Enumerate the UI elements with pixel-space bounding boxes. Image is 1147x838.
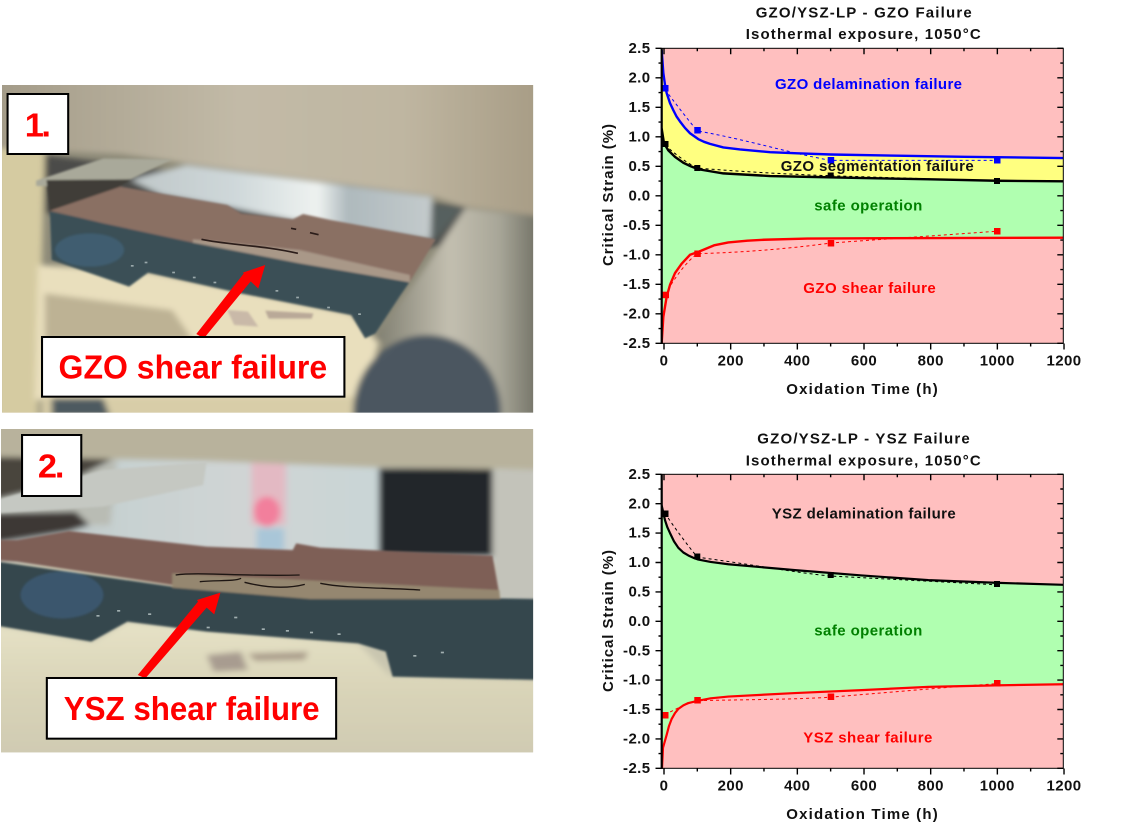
x axis tick labels: 200 [718,353,744,370]
x axis tick labels: 1000 [980,353,1015,370]
label box: YSZ shear failure [47,678,336,739]
axes and ticks [658,474,1065,772]
x axis tick labels: 800 [918,778,944,795]
x axis tick labels: 600 [851,778,877,795]
photograph of GZO coating failure [2,85,534,413]
x axis tick labels: 1200 [1047,353,1081,370]
region: safe operation [662,147,1063,314]
y axis title: Critical Strain (%) [600,550,617,692]
panel: photo 1, GZO shear failure [2,85,534,413]
axes and ticks [658,48,1065,346]
label box: 2. [22,435,81,496]
chart: YSZ failure map [600,430,1081,823]
y axis tick labels: -2.0 [623,730,650,748]
y axis tick labels: -1.0 [623,672,650,689]
region labels: safe operation [814,198,922,214]
x axis tick labels: 0 [660,353,668,370]
y axis tick labels: -2.0 [623,305,650,322]
label box: 1. [8,94,68,154]
label box: YSZ shear failure: YSZ shear failure [64,690,320,728]
region labels [775,76,974,297]
y axis tick labels: 1.5 [628,99,650,116]
chart title [746,4,981,43]
y axis tick labels: -0.5 [623,217,650,234]
chart title: Isothermal exposure, 1050°C [746,26,981,43]
y axis tick labels: 1.0 [628,128,650,145]
x axis title: Oxidation Time (h) [786,806,938,823]
chart title: Isothermal exposure, 1050°C [746,452,981,469]
label box: 1.: 1. [25,107,51,145]
plot regions and curves [661,48,1065,343]
x axis tick labels: 0 [660,778,668,795]
region: safe operation [662,517,1063,745]
x axis tick labels: 400 [784,353,810,370]
y axis tick labels: 0.0 [628,187,650,204]
y axis tick labels: 2.0 [628,69,650,86]
arrow pointing at crack [196,265,265,338]
chart: GZO failure map [600,4,1081,398]
curve: segmentation limit [662,129,1065,181]
y axis tick labels: 0.0 [628,613,650,630]
region labels: safe operation [814,622,922,640]
y axis tick labels: 2.0 [628,495,650,512]
label box: GZO shear failure: GZO shear failure [59,349,327,386]
y axis tick labels: 0.5 [628,584,650,600]
region labels: GZO segmentation failure [781,158,974,175]
label box: GZO shear failure [42,337,344,397]
dashed data lines [665,513,997,585]
x axis tick labels: 600 [851,353,877,370]
region labels: YSZ shear failure [803,730,932,746]
x axis tick labels: 800 [918,353,944,370]
chart title: GZO/YSZ-LP - GZO Failure [756,4,972,21]
markers [662,510,1000,718]
curve: shear limit [662,684,1065,768]
y axis tick labels: 2.5 [628,466,650,483]
plot regions and curves [661,474,1065,768]
x axis tick labels: 200 [718,778,744,795]
y axis tick labels [623,466,650,777]
region labels [772,506,956,746]
curve: shear limit [662,238,1065,343]
y axis tick labels: -1.5 [623,701,650,718]
y axis tick labels: 1.0 [628,554,650,571]
region: segmentation failure [662,77,1063,180]
chart title [746,430,981,469]
x axis tick labels: 400 [784,778,810,795]
y axis tick labels: -2.5 [623,760,650,777]
region labels: GZO delamination failure [775,76,962,93]
x axis tick labels: 1200 [1047,778,1081,795]
arrow pointing at crack [138,593,220,678]
region labels: GZO shear failure [803,280,936,297]
label box: 2.: 2. [38,448,64,485]
chart title: GZO/YSZ-LP - YSZ Failure [757,430,970,447]
photograph of YSZ coating failure [0,418,544,758]
y axis tick labels: -1.5 [623,276,650,293]
markers [662,85,1000,298]
panel: photo 2, YSZ shear failure [0,418,544,758]
x axis title: Oxidation Time (h) [786,381,938,398]
y axis tick labels: 1.5 [628,525,650,542]
y axis tick labels: 2.5 [628,40,650,57]
curve: delamination limit [662,505,1065,585]
y axis tick labels: -0.5 [623,642,650,659]
dashed data lines [665,90,997,160]
y axis tick labels: -2.5 [623,335,650,352]
y axis tick labels: 0.5 [628,158,650,175]
y axis tick labels [623,40,650,352]
x axis tick labels [660,778,1081,795]
x axis tick labels [660,353,1081,370]
y axis tick labels: -1.0 [623,246,650,263]
curve: delamination limit [662,50,1065,158]
y axis title: Critical Strain (%) [600,124,617,266]
region labels: YSZ delamination failure [772,506,956,522]
x axis tick labels: 1000 [980,778,1015,795]
